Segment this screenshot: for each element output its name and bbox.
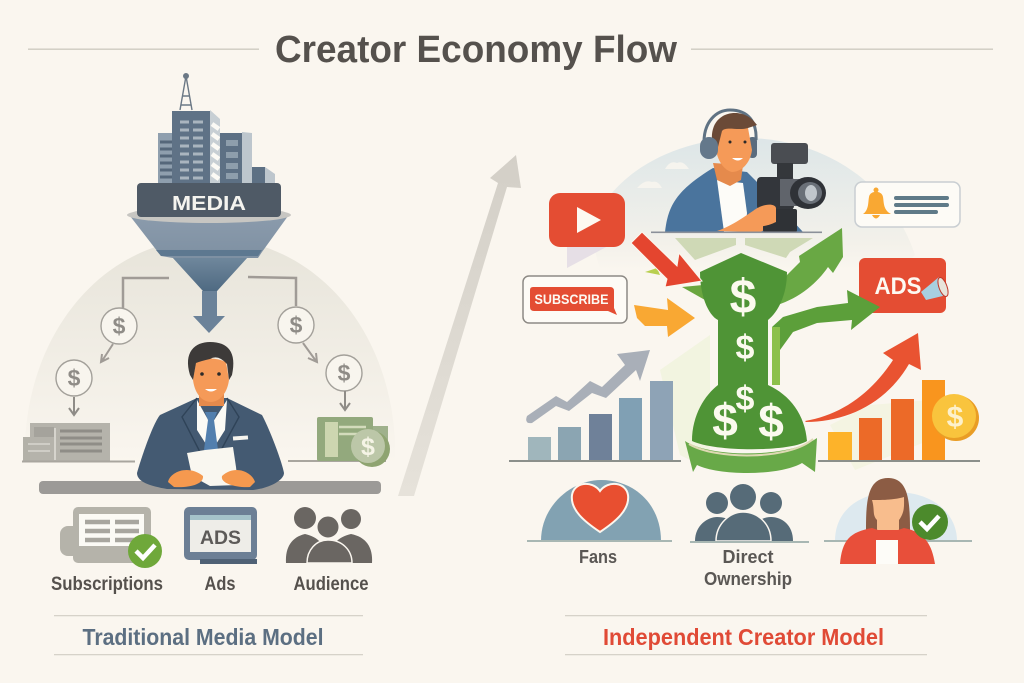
outflow arrow right — [772, 290, 880, 352]
creator stand line — [651, 232, 822, 233]
top wedges — [675, 238, 736, 260]
labels: traditional revenue: Subscriptions — [51, 574, 163, 595]
dollars: $ — [758, 395, 784, 447]
labels: traditional revenue — [51, 574, 368, 595]
body — [692, 253, 807, 449]
heading: independent creator model: Independent Creator Model — [603, 624, 884, 650]
icon: newspaper — [22, 423, 135, 462]
person: news anchor — [137, 342, 284, 490]
coin — [933, 395, 979, 441]
icon: fans — [527, 480, 672, 542]
connector lines and dollar coins — [56, 277, 362, 415]
labels: traditional revenue: Ads — [204, 574, 236, 595]
icon: direct ownership — [690, 484, 809, 543]
icon: media buildings — [158, 73, 275, 184]
trend arrow — [805, 333, 921, 422]
papers and hands — [187, 447, 238, 486]
heading: traditional media model: Traditional Media Model — [82, 624, 324, 650]
icon: clouds — [637, 162, 689, 188]
trend arrow — [526, 350, 650, 423]
icon: ads screen — [184, 507, 257, 564]
labels: traditional revenue: Audience — [294, 574, 368, 595]
dollars: $ — [712, 394, 738, 446]
table — [39, 481, 381, 494]
base swoosh — [685, 438, 817, 473]
suit — [137, 398, 284, 490]
panel: traditional media model — [22, 73, 395, 655]
labels: creator revenue: Direct — [722, 547, 774, 567]
arrow: red inflow — [631, 232, 702, 287]
labels: creator revenue — [579, 547, 792, 589]
person: creator with camera — [665, 110, 826, 232]
headphones band and far cup — [704, 110, 756, 142]
panel: independent creator model — [509, 110, 980, 655]
camera — [771, 143, 808, 164]
icon: subscribe box — [523, 276, 627, 323]
outflow arrow up — [777, 228, 843, 305]
labels: creator revenue: Fans — [579, 547, 617, 567]
chart: orange bars — [805, 333, 980, 462]
icon: youtube play — [549, 193, 625, 247]
labels: creator revenue: Ownership — [704, 569, 792, 589]
chart: blue bars — [509, 350, 681, 462]
icon: creator owner — [824, 478, 972, 564]
icon: money document: $ — [361, 433, 375, 461]
label: media: MEDIA — [172, 193, 246, 215]
icon: audience — [286, 507, 372, 563]
title: Creator Economy Flow — [275, 29, 677, 71]
arrow: orange inflow — [634, 298, 695, 337]
background arch — [590, 138, 915, 270]
dollars — [712, 271, 784, 447]
icon: money document — [288, 417, 390, 467]
background arch — [25, 238, 395, 465]
icon: bell notification — [855, 182, 960, 227]
inflow wedge — [682, 285, 705, 300]
face and hair — [716, 127, 752, 172]
icon: subscribe box: SUBSCRIBE — [534, 291, 608, 307]
dollars: $ — [736, 329, 755, 367]
green money hourglass — [645, 228, 880, 473]
chart: orange bars: $ — [947, 401, 964, 434]
icon: ads sign: ADS — [874, 273, 922, 300]
icon: ads sign — [859, 258, 950, 313]
icon: subscriptions — [60, 507, 162, 568]
icon: ads screen: ADS — [200, 528, 241, 549]
arrow: transition diagonal — [398, 155, 521, 496]
dollars: $ — [730, 271, 757, 324]
dollars: $ — [736, 380, 755, 418]
icon: media funnel — [127, 183, 291, 333]
neck and head — [199, 388, 224, 406]
